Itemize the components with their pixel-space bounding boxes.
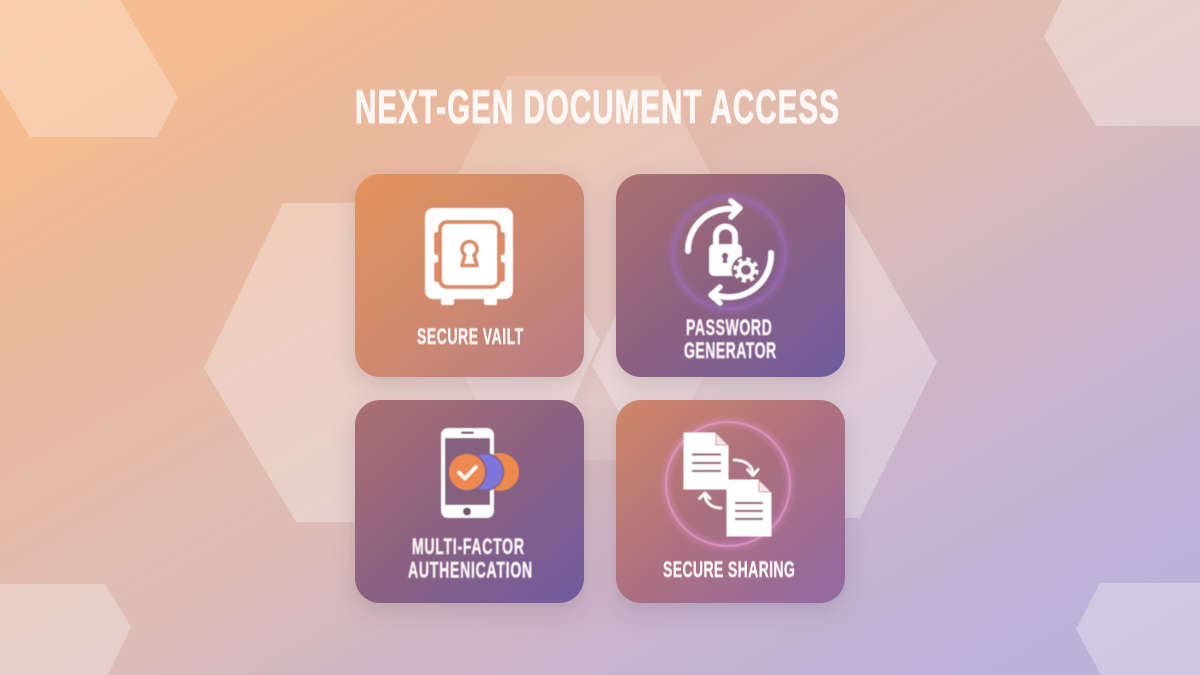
label: multi-factor authentication: MULTI-FACTOR bbox=[412, 534, 524, 559]
panel: password generator bbox=[616, 174, 845, 377]
panel: multi-factor authentication bbox=[355, 400, 584, 603]
icon: phone with check badge bbox=[441, 428, 519, 518]
label: password generator bbox=[684, 315, 776, 363]
icon: safe bbox=[425, 208, 513, 305]
card background: secure sharing bbox=[616, 400, 845, 603]
card background: secure vault bbox=[355, 174, 584, 377]
panel: secure vault bbox=[355, 174, 584, 377]
label: multi-factor authentication bbox=[408, 534, 532, 582]
title: NEXT-GEN DOCUMENT ACCESS bbox=[355, 81, 839, 134]
card background: password generator bbox=[616, 174, 845, 377]
label: password generator: PASSWORD bbox=[686, 315, 772, 340]
card background: multi-factor authentication bbox=[355, 400, 584, 603]
label: multi-factor authentication: AUTHENICATION bbox=[408, 557, 532, 582]
icon: rotating lock with gear bbox=[673, 197, 785, 309]
label: password generator: GENERATOR bbox=[684, 338, 776, 363]
label: secure vault: SECURE VAILT bbox=[417, 324, 524, 349]
icon: exchanging documents bbox=[666, 422, 790, 546]
panel: secure sharing bbox=[616, 400, 845, 603]
label: secure sharing: SECURE SHARING bbox=[663, 557, 795, 582]
